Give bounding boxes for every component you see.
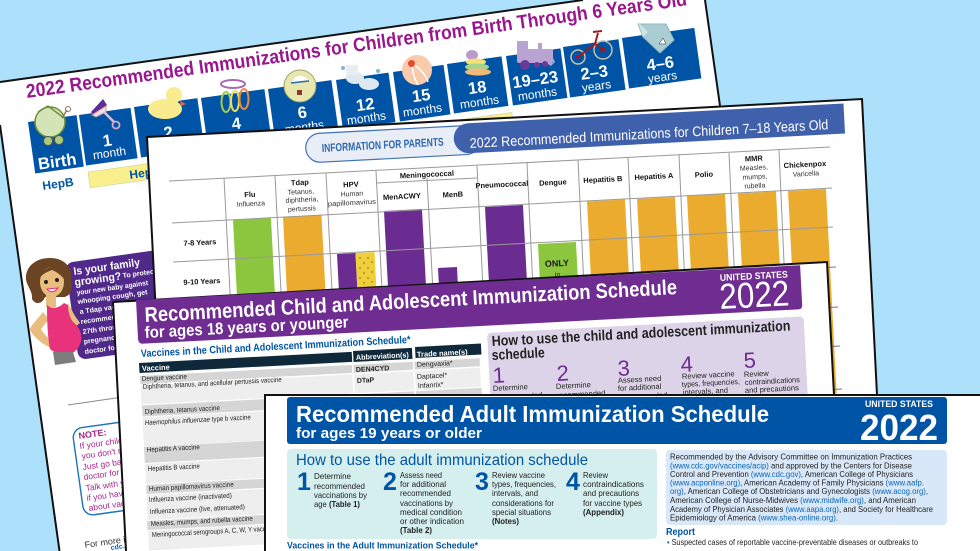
text: report section [666,526,918,547]
step 1: age (Table 1) [314,499,360,509]
panel: how to use adult schedule [287,449,657,539]
sheet: immunizations 7 to 18 years [147,99,877,421]
table column headers: Polio [694,170,714,179]
step 4: contraindications [583,479,644,489]
sheet: immunizations birth through 6 years [0,0,760,551]
row labels: 7-8 Years [183,237,216,248]
age labels: 1 [102,131,113,151]
panel: how to use child schedule: 5 [743,347,756,373]
header: purple banner [136,265,802,344]
panel: how to use child schedule: types, frequencies, [682,377,740,389]
step 3: considerations for [492,498,554,508]
sheet: adult schedule [265,395,980,551]
step 3: (Notes) [492,516,519,526]
age labels: 4 [231,114,243,134]
step 2: vaccinations by [400,498,454,508]
age labels: years [647,68,678,86]
panel: note box: you don't need [81,443,138,461]
vaccine row labels: Infanrix* [418,382,444,390]
banner: 7 to 18 years title: 2022 Recommended Immunizations for Children 7–18 Years Old [469,116,829,151]
callout text: To protect [122,268,157,280]
step 2: (Table 2) [400,525,432,535]
panel: how to use child schedule: contraindications [745,375,800,387]
panel: how to use child schedule: schedule [491,345,545,364]
vaccine row labels: Dengvaxia* [417,360,453,369]
age labels: months [217,129,258,149]
vaccine row labels: DTaP [357,377,375,385]
step 2 [383,468,464,535]
panel: how to use child schedule: How to use the child and adolescent immunization [491,318,791,350]
panel: how to use child schedule: and precautions [745,383,799,395]
table column headers: Flu [244,190,256,199]
table column headers: MMR [745,154,764,163]
age labels: months [402,100,443,120]
icon: ring toy [221,80,248,112]
pattern: HPV yellow dots [359,257,373,289]
age labels: month [92,144,127,162]
vaccine row labels: Meningococcal serogroups A, C, W, Y vaccine [152,526,274,539]
step 3: Review vaccine [492,470,545,480]
icon: stacking toy [465,50,491,76]
vaccine row labels: Dengue vaccine [142,374,187,383]
icon: tricycle [571,31,612,64]
icon: rattle [91,99,120,128]
callout text [73,257,157,356]
panel: how to use child schedule: 2 [556,360,569,386]
sheet: child and adolescent schedule [113,262,834,551]
label: HepB at birth: HepB [41,175,75,193]
step 2: Assess need [400,470,442,480]
vaccine row labels: Daptacel* [417,372,448,381]
icon: rubber duck [148,87,186,119]
header: blue banner: for ages 19 years or older [296,425,482,442]
bar: HepB 1 to 18 months yellow band [88,112,514,188]
step 1: vaccinations by [314,490,368,500]
panel: recommended by text: Control and Prevention (www.cdc.gov), American College of Physicians [670,469,913,479]
table column headers: Chickenpox [783,159,827,170]
panel: note box: Just go back [82,455,131,472]
age labels: 4–6 [645,53,675,75]
vaccine row labels: Influenza vaccine (live, attenuated) [150,504,245,516]
age labels: months [346,108,387,128]
table column headers: MenB [442,189,464,200]
panel: how to use child schedule: recommended [557,388,606,400]
text: report section: • Suspected cases of reportable vaccine-preventable diseases or outbreaks to [667,537,918,547]
step 3: intervals, and [492,488,538,498]
panel: how to use child schedule: recommended [494,390,543,402]
panel: how to use child schedule: for additional [618,382,662,393]
pill: information for parents: INFORMATION FOR PARENTS [322,137,444,155]
panel: note box: Talk with your [85,476,137,493]
step 3: 3 [475,468,489,496]
step 1: recommended [314,481,365,491]
panel: how to use child schedule: Assess need [618,374,662,385]
step 4: and precautions [583,488,639,498]
icon: bib [284,70,316,102]
table column headers: mumps, [742,173,768,182]
table column headers: Measles, [740,164,768,173]
panel: how to use child schedule: intervals, and [683,386,728,397]
table column headers: MenACWY [383,191,421,202]
panel: recommended by text: org), American College of Obstetricians and Gynecologists (www.acog.org), [670,486,928,496]
table column headers: Hepatitis B [583,174,623,185]
step 4 [566,468,644,517]
header: blue banner [287,397,947,448]
age labels: Birth [37,150,78,174]
panel: how to use child schedule: Review vaccine [682,369,735,381]
table column headers: Influenza [237,200,265,209]
panel: note box [72,415,183,516]
panel: how to use child schedule: 4 [680,351,693,377]
table: vaccines: Vaccine [142,363,170,373]
step 2: 2 [383,468,397,496]
age labels: 6 [297,103,308,123]
text: dengue only in: ONLY [545,258,569,269]
table column headers: Dengue [539,177,567,188]
step 4: 4 [566,468,580,496]
age band: blue age boxes [28,28,701,173]
step 1: 1 [297,468,311,496]
header: blue banner: 2022 [860,407,938,448]
table: vaccines: Abbreviation(s) [356,350,410,362]
step 4: (Appendix) [583,507,624,517]
panel: how to use child schedule: Determine [493,382,528,393]
panel: recommended by text: American College of Nurse-Midwives (www.midwife.org), and American [670,495,916,505]
vaccine row labels: Human papillomavirus vaccine [149,482,234,493]
panel: recommended by text [666,450,947,525]
callout text: growing? [74,271,122,289]
vaccine row labels: Diphtheria, tetanus vaccine [145,405,220,416]
table column headers: Pneumococcal [475,179,529,190]
age labels: years [581,77,612,95]
step 1: Determine [314,471,351,481]
vaccine row labels: Measles, mumps, and rubella vaccine [151,516,253,528]
panel: note box: if you have [86,487,128,503]
row labels: 9-10 Years [183,276,221,287]
pill: information for parents [305,125,481,163]
text: dengue only in: in [555,272,561,279]
header: purple banner: UNITED STATES [720,269,788,284]
step 3: types, frequencies, [492,479,556,489]
age labels: 19–23 [511,68,559,92]
header: purple banner: for ages 18 years or younger [144,313,349,342]
age labels: 15 [411,86,432,106]
panel: note box: doctor for the [83,465,134,482]
illustration: pregnant woman [26,258,81,365]
panel: how to use child schedule: Review [744,369,769,379]
table column headers: Hepatitis A [634,171,674,182]
callout text: a Tdap vaccine [79,302,130,316]
age labels: 2–3 [579,62,609,84]
table column headers: Tetanus, [288,188,314,197]
header: blue banner: UNITED STATES [865,399,933,409]
age labels [37,53,678,174]
age labels: months [459,92,500,112]
panel: recommended by text: Recommended by the Advisory Committee on Immunization Practices [670,452,912,462]
vaccine row labels: DEN4CYD [356,365,390,374]
age labels: 18 [467,78,488,98]
text: report section: Report [666,526,695,538]
vaccine row labels: Haemophilus influenzae type b vaccine [145,414,251,427]
table: vaccines: Trade name(s) [417,347,468,359]
step 2: or other indication [400,516,464,526]
text: dengue only in [545,258,569,279]
table column headers [237,154,827,214]
panel: how to use child schedule: Determine [556,380,591,391]
header: purple banner: 2022 [718,272,790,317]
vaccine bars [233,189,837,396]
callout text: pregnancy [83,334,119,346]
table grid lines [169,147,842,421]
table column headers: Meningococcal [400,169,454,180]
panel: recommended by text: Epidemiology of America (www.shea-online.org). [670,512,838,522]
vaccine row labels: Hepatitis B vaccine [148,463,200,473]
panel: recommended by text: (www.acponline.org), American Academy of Family Physicians (www.aafp. [670,478,924,488]
vaccine row labels [142,360,453,539]
panel: how to use child schedule: 1 [492,362,505,388]
table column headers: pertussis [288,205,317,214]
banner: 7 to 18 years title [453,104,845,154]
table column headers: diphtheria, [285,196,318,205]
age labels: 2 [163,123,174,143]
step 2: recommended [400,488,451,498]
panel: how to use child schedule: 3 [617,355,630,381]
panel: note box: about vaccines [88,495,145,513]
table: vaccines [139,344,489,550]
callout text: recommended [80,312,129,326]
icon: stroller [35,106,70,146]
callout text: whooping cough, get [76,289,149,306]
header: purple banner: Recommended Child and Adolescent Immunization Schedule [144,276,678,327]
callout text: your new baby against [76,280,149,297]
callout text: doctor for [84,344,118,356]
panel: how to use adult schedule: How to use the adult immunization schedule [296,452,588,469]
heading: vaccines in the schedule: Vaccines in the Child and Adolescent Immunization Schedule* [141,334,412,360]
step 3 [475,468,556,526]
text: for more information: For more info [84,533,138,550]
panel: note box: NOTE: [78,427,107,441]
icon: beach ball [402,55,432,85]
vaccine row labels: Hepatitis A vaccine [147,444,200,454]
table column headers: Varicella [793,170,819,179]
table column headers: HPV [343,180,359,189]
panel: how to use child schedule [487,316,808,413]
icon: toy train [517,41,555,70]
panel: how to use child schedule: recommended [619,390,668,402]
panel: note box: If your child [79,435,124,451]
callout text: Is your family [73,257,142,278]
table column headers: rubella [744,182,766,191]
row labels [183,237,221,287]
age labels: months [517,84,558,104]
table column headers: Tdap [291,178,309,187]
step 2: for additional [400,479,446,489]
step 3: special situations [492,507,551,517]
icon: booties [341,65,380,90]
table header cells [139,344,481,373]
table column headers: papillomavirus [328,199,377,208]
table column headers: Human [340,190,363,199]
age labels: months [284,117,325,137]
step 4: for vaccine types [583,498,642,508]
icon: picture book [638,22,674,53]
step 1 [297,468,368,509]
step 4: Review [583,470,609,480]
callout text: 27th through [82,323,126,336]
panel: recommended by text: Academy of Physician Associates (www.aapa.org), and Society for Healthcare [670,504,933,514]
vaccine row labels: Influenza vaccine (inactivated) [149,493,232,504]
panel: is your family growing callout [65,248,188,360]
header: blue banner: Recommended Adult Immunization Schedule [296,401,769,427]
age labels: 12 [355,95,376,115]
bar: HepB 1 to 18 months yellow band: HepB [128,164,162,182]
vaccine row labels: Diphtheria, tetanus, and acellular pertussis vaccine [143,377,282,391]
panel: recommended by text: (www.cdc.gov/vaccines/acip) and approved by the Centers for Disease [670,460,912,470]
step 2: medical condition [400,507,462,517]
